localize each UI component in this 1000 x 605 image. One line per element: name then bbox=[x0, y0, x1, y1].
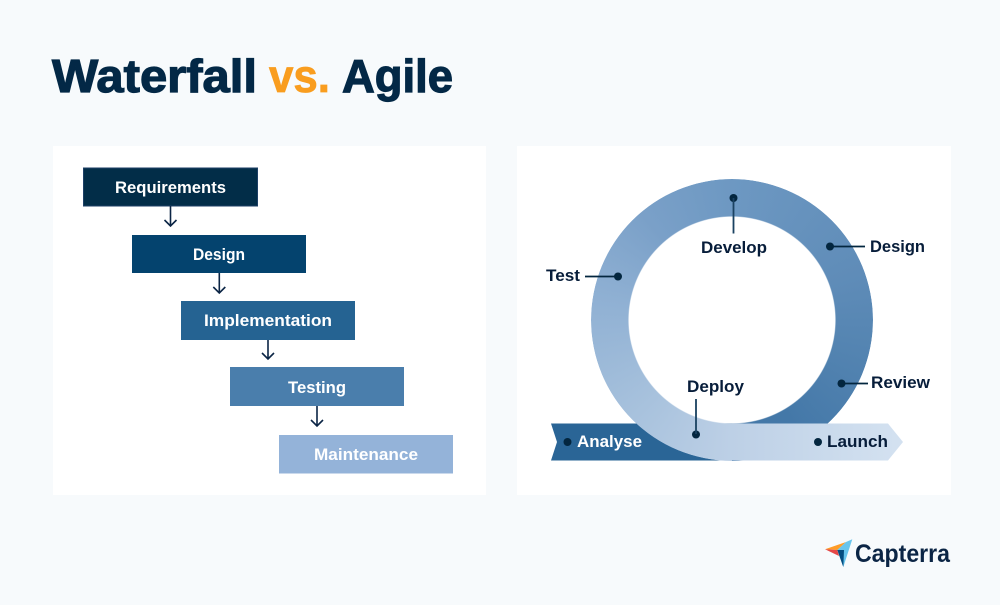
step: Maintenance bbox=[279, 435, 453, 474]
step: Testing: Testing bbox=[288, 378, 346, 397]
waterfall diagram bbox=[83, 168, 453, 474]
label: Design: Design bbox=[870, 238, 925, 256]
label: Analyse: Analyse bbox=[577, 432, 642, 451]
label: Launch: Launch bbox=[827, 432, 888, 451]
label: Review: Review bbox=[871, 374, 930, 392]
title: Agile bbox=[342, 50, 453, 102]
step: Testing bbox=[230, 367, 404, 406]
label: Develop bbox=[701, 194, 767, 257]
label: Test bbox=[546, 267, 622, 285]
label: Deploy: Deploy bbox=[687, 378, 745, 396]
step: Design: Design bbox=[193, 245, 245, 264]
ribbon: launch end bbox=[732, 424, 903, 460]
label: Review bbox=[838, 374, 930, 392]
step: Requirements bbox=[84, 168, 258, 206]
wordmark: Capterra bbox=[855, 540, 951, 568]
title bbox=[51, 50, 453, 102]
arrow: Requirements to Design bbox=[164, 206, 176, 226]
arrow: Design to Implementation bbox=[213, 273, 225, 293]
title: Waterfall bbox=[52, 50, 257, 102]
ring: agile cycle bbox=[591, 179, 873, 461]
label: Develop: Develop bbox=[701, 239, 767, 257]
step: Implementation: Implementation bbox=[204, 311, 332, 330]
icon: Capterra arrow bbox=[825, 539, 852, 567]
step: Maintenance: Maintenance bbox=[314, 445, 418, 464]
label: Deploy bbox=[687, 378, 745, 438]
panel: waterfall bbox=[53, 146, 486, 495]
step: Design bbox=[132, 235, 306, 273]
panel: agile bbox=[517, 146, 951, 495]
step: Implementation bbox=[181, 301, 355, 340]
label: Design bbox=[826, 238, 925, 256]
arrow: Implementation to Testing bbox=[262, 340, 274, 359]
arrow: Testing to Maintenance bbox=[311, 406, 323, 426]
step: Requirements: Requirements bbox=[115, 178, 226, 197]
title: vs. bbox=[269, 50, 330, 102]
label: Test: Test bbox=[546, 267, 581, 285]
